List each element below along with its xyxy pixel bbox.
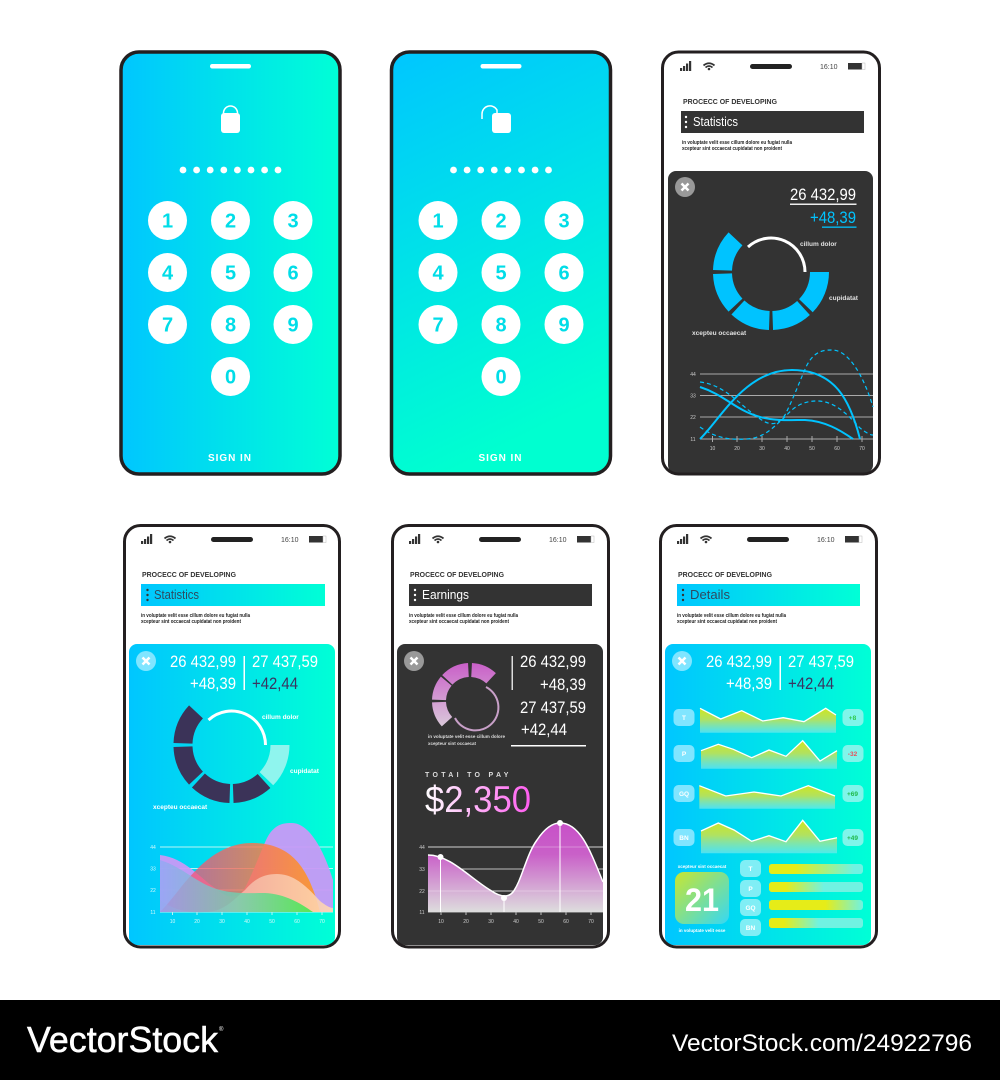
area chart: 70	[319, 919, 325, 925]
title bar: Statistics	[154, 587, 199, 602]
headline values: 26 432,99	[520, 653, 586, 671]
donut chart	[722, 238, 820, 320]
score tile: 21	[685, 882, 719, 918]
headline values: +48,39	[810, 209, 856, 227]
phone 6 screen	[660, 526, 876, 947]
area chart: 30	[219, 919, 225, 925]
phone 5 screen	[392, 526, 608, 947]
keypad: 7	[162, 314, 173, 336]
sparkline rows: +49	[847, 835, 858, 842]
horizontal bars: P	[748, 886, 753, 893]
phone 2 frame	[392, 52, 610, 474]
headline values	[170, 653, 318, 693]
keypad: 0	[495, 366, 507, 388]
phone 4 frame	[124, 526, 340, 947]
passcode dots	[450, 167, 552, 173]
phone 4: gradient statistics	[124, 526, 340, 947]
area chart: 60	[294, 919, 300, 925]
phone 6 frame	[660, 526, 876, 947]
horizontal bars: GQ	[745, 905, 756, 912]
sparkline rows: +69	[847, 791, 858, 798]
donut labels: cupidatat	[290, 768, 320, 775]
area chart: 22	[419, 889, 425, 895]
status bar: 16:10	[817, 537, 835, 544]
area chart: 30	[488, 919, 494, 925]
close button	[136, 651, 156, 671]
donut chart	[183, 711, 280, 794]
line chart: 60	[834, 446, 840, 452]
line chart: 70	[859, 446, 865, 452]
keypad: 5	[225, 262, 236, 284]
panel: dark statistics	[668, 171, 873, 473]
description: xcepteur sint occaecat cupidatat non proident	[141, 619, 241, 625]
area chart	[150, 823, 333, 925]
headline values: 26 432,99	[790, 186, 856, 204]
phone 5 frame	[392, 526, 608, 947]
status bar: 16:10	[549, 537, 567, 544]
status bar	[680, 61, 865, 71]
keypad: 2	[495, 210, 507, 232]
passcode dots	[180, 167, 281, 173]
line chart: 30	[759, 446, 765, 452]
title bar	[409, 584, 592, 606]
headline values: +42,44	[521, 721, 567, 739]
description	[677, 613, 786, 625]
title bar	[681, 111, 864, 133]
headline values: 27 437,59	[520, 699, 586, 717]
status bar	[677, 534, 862, 544]
line chart: 10	[710, 446, 715, 452]
area chart: 40	[513, 919, 519, 925]
area chart: 20	[463, 919, 469, 925]
brand name: VectorStock	[27, 1019, 219, 1060]
image url: VectorStock.com/24922796	[672, 1030, 972, 1057]
area chart: 33	[419, 867, 425, 873]
status bar	[409, 534, 594, 544]
line chart: 33	[690, 394, 696, 400]
sparkline rows: +8	[849, 715, 857, 722]
description	[682, 140, 792, 152]
area chart: 10	[170, 919, 175, 925]
phone 1: locked keypad	[121, 52, 340, 474]
area chart: 50	[538, 919, 544, 925]
phone 3: dark statistics	[662, 52, 880, 474]
sparkline rows: T	[682, 715, 686, 722]
donut caption: in voluptate velit esse cillum dolore	[428, 734, 505, 740]
description: in voluptate velit esse cillum dolore eu fugiat nulla	[682, 140, 792, 146]
panel: gradient statistics	[129, 644, 335, 945]
headline values: +42,44	[788, 675, 834, 693]
keypad: 1	[162, 210, 173, 232]
title bar: Earnings	[422, 587, 469, 602]
description: xcepteur sint occaecat cupidatat non proident	[682, 146, 782, 152]
donut labels	[153, 714, 320, 811]
keypad: 9	[287, 314, 299, 336]
status bar	[141, 534, 326, 544]
phone 5: earnings	[392, 526, 608, 947]
description: in voluptate velit esse cillum dolore eu fugiat nulla	[409, 613, 518, 619]
line chart: 40	[784, 446, 790, 452]
donut caption: xcepteur sint occaecat	[428, 741, 476, 747]
area chart: 44	[150, 845, 156, 851]
keypad: 4	[162, 262, 174, 284]
icon: open padlock	[482, 106, 511, 133]
headline values	[706, 653, 854, 693]
description	[409, 613, 518, 625]
phone 6: details	[660, 526, 876, 947]
donut caption	[428, 734, 505, 747]
description: in voluptate velit esse cillum dolore eu fugiat nulla	[141, 613, 250, 619]
keypad: 4	[432, 262, 444, 284]
area chart: 11	[150, 910, 156, 916]
registered mark: ®	[219, 1026, 224, 1033]
close button	[675, 177, 695, 197]
headline values	[511, 653, 586, 746]
area chart	[419, 820, 603, 925]
line chart: 44	[690, 372, 696, 378]
sign in label: SIGN IN	[208, 453, 251, 464]
headline values: 26 432,99	[170, 653, 236, 671]
donut labels: xcepteu occaecat	[153, 804, 208, 811]
panel: details	[665, 644, 871, 945]
status bar: 16:10	[820, 64, 838, 71]
area chart: 20	[194, 919, 200, 925]
overline heading: PROCECC OF DEVELOPING	[410, 570, 504, 579]
area chart: 11	[419, 910, 425, 916]
area chart: 22	[150, 888, 156, 894]
sparkline rows: P	[682, 751, 687, 758]
keypad	[148, 201, 312, 396]
description: xcepteur sint occaecat cupidatat non proident	[677, 619, 777, 625]
description: in voluptate velit esse cillum dolore eu fugiat nulla	[677, 613, 786, 619]
donut labels: cillum dolor	[262, 714, 299, 721]
keypad: 6	[287, 262, 299, 284]
horizontal bars: T	[749, 866, 753, 873]
sparkline rows: GQ	[679, 791, 689, 798]
keypad: 8	[225, 314, 236, 336]
keypad: 7	[432, 314, 444, 336]
title bar: Statistics	[693, 114, 738, 129]
headline values: 27 437,59	[788, 653, 854, 671]
headline values: 26 432,99	[706, 653, 772, 671]
donut labels	[692, 241, 859, 337]
area chart: 10	[438, 919, 444, 925]
status bar: 16:10	[281, 537, 299, 544]
keypad: 3	[558, 210, 570, 232]
overline heading: PROCECC OF DEVELOPING	[678, 570, 772, 579]
panel: earnings	[397, 644, 603, 945]
sparkline rows: BN	[679, 835, 689, 842]
area chart: 70	[588, 919, 594, 925]
area chart: 33	[150, 866, 156, 872]
phone 4 screen	[124, 526, 340, 947]
line chart: 20	[734, 446, 740, 452]
headline values: +48,39	[190, 675, 236, 693]
headline values: +42,44	[252, 675, 298, 693]
description: xcepteur sint occaecat cupidatat non proident	[409, 619, 509, 625]
title bar	[677, 584, 860, 606]
sparkline rows	[674, 708, 864, 853]
headline values: 27 437,59	[252, 653, 318, 671]
keypad	[418, 201, 584, 396]
footer band	[0, 1000, 1000, 1080]
speaker	[480, 64, 522, 68]
line chart	[690, 350, 873, 452]
score tile: xcepteur sint occaecat	[678, 864, 727, 869]
close button	[672, 651, 692, 671]
phone 2: unlocked keypad	[392, 52, 610, 474]
overline heading: PROCECC OF DEVELOPING	[683, 97, 777, 106]
total amount: $2,350	[425, 779, 531, 820]
line chart: 50	[809, 446, 815, 452]
donut labels: cupidatat	[829, 295, 859, 302]
speaker	[210, 64, 251, 68]
area chart: 44	[419, 845, 425, 851]
keypad: 9	[558, 314, 570, 336]
area chart: 40	[244, 919, 250, 925]
keypad: 8	[495, 314, 507, 336]
keypad: 3	[287, 210, 299, 232]
line chart: 22	[690, 415, 696, 421]
line chart: 11	[690, 437, 696, 443]
score tile	[675, 864, 729, 933]
donut labels: xcepteu occaecat	[692, 330, 747, 337]
donut labels: cillum dolor	[800, 241, 837, 248]
keypad: 2	[225, 210, 236, 232]
title bar: Details	[690, 587, 730, 602]
horizontal bars: BN	[746, 925, 755, 932]
headline values: +48,39	[726, 675, 772, 693]
keypad: 5	[495, 262, 507, 284]
phone 1 frame	[121, 52, 340, 474]
score tile: in voluptate velit esse	[679, 928, 726, 933]
area chart: 60	[563, 919, 569, 925]
description	[141, 613, 250, 625]
phone 3 screen	[662, 52, 880, 474]
sign in label: SIGN IN	[478, 453, 522, 464]
sparkline rows: -32	[848, 751, 858, 758]
overline heading: PROCECC OF DEVELOPING	[142, 570, 236, 579]
total label: TOTAI TO PAY	[425, 772, 512, 779]
donut chart	[439, 670, 498, 730]
icon: closed padlock	[221, 106, 240, 133]
headline values: +48,39	[540, 676, 586, 694]
keypad: 6	[558, 262, 570, 284]
horizontal bars	[740, 860, 863, 936]
keypad: 1	[432, 210, 444, 232]
phone 3 frame	[662, 52, 880, 474]
title bar	[141, 584, 325, 606]
close button	[404, 651, 424, 671]
area chart: 50	[269, 919, 275, 925]
headline values	[790, 186, 856, 228]
keypad: 0	[225, 366, 236, 388]
